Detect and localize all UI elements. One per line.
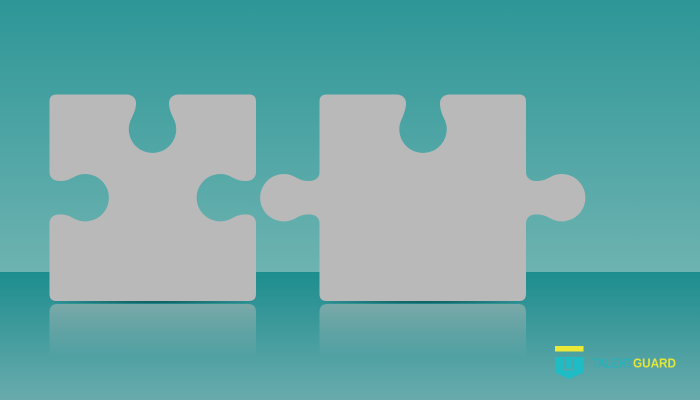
- logo bar: [555, 346, 584, 352]
- wordmark: TALENT: TALENT: [592, 356, 633, 370]
- floor: [0, 272, 700, 400]
- logo wordmark: [592, 356, 676, 370]
- wordmark: GUARD: GUARD: [633, 356, 676, 370]
- contact shadow: left piece: [45, 300, 261, 304]
- background wall: [0, 0, 700, 272]
- puzzle piece: left, with three notches: [50, 94, 256, 301]
- logo shield: [555, 357, 584, 379]
- logo: TalentGuard: [555, 346, 676, 379]
- reflection: left piece: [50, 304, 256, 358]
- reflection: right piece: [320, 304, 526, 358]
- puzzle piece: right, with top notch and two side tabs: [260, 94, 585, 301]
- contact shadow: right piece: [315, 300, 531, 304]
